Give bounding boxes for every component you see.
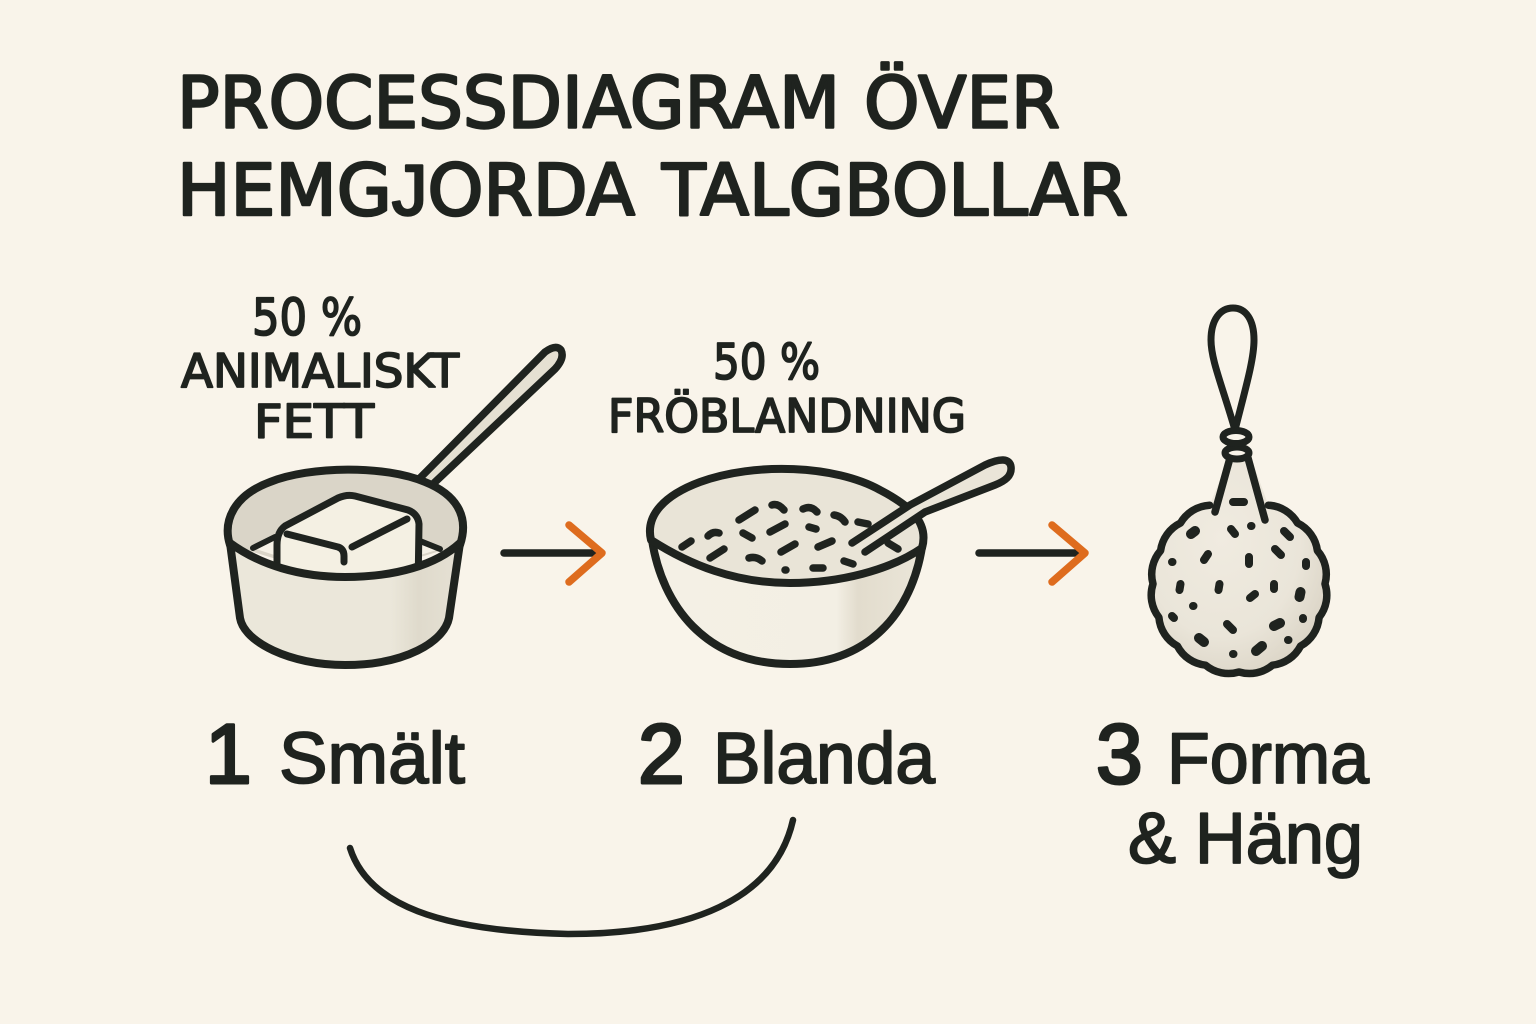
- step 2 label: Blanda: [713, 719, 936, 799]
- pan handle: [420, 347, 562, 484]
- title: HEMGJORDA: [177, 149, 635, 232]
- step 3 label: Forma: [1167, 719, 1370, 799]
- title: TALGBOLLAR: [661, 149, 1128, 232]
- title: PROCESSDIAGRAM: [177, 62, 840, 144]
- bowl rim: [650, 469, 924, 583]
- label: 50% animaliskt fett: ANIMALISKT: [181, 344, 460, 398]
- bowl body: [652, 540, 923, 664]
- label: 50% animaliskt fett: FETT: [254, 394, 375, 448]
- label: 50% fröblandning: FRÖBLANDNING: [608, 389, 966, 443]
- step 3 label: Häng: [1195, 799, 1363, 879]
- pool edges: [253, 537, 440, 549]
- melted fat pool: [253, 537, 440, 578]
- knot: [1225, 447, 1249, 459]
- icon: hanging tallow ball: [1151, 308, 1327, 674]
- ball fill: [1151, 455, 1327, 674]
- step 3 label: [1096, 707, 1370, 879]
- arrow: step 2 to step 3: [979, 525, 1085, 582]
- step 3 label: &: [1128, 799, 1176, 879]
- title: ÖVER: [864, 62, 1060, 144]
- icon: saucepan with fat: [228, 347, 562, 665]
- strings to ball: [1215, 458, 1265, 520]
- step 1 label: Smält: [279, 719, 465, 799]
- step 3 label: 3: [1096, 707, 1143, 801]
- pan body: [230, 543, 460, 665]
- step 2 label: 2: [638, 707, 685, 801]
- fat cube: [277, 495, 419, 590]
- seeds: [682, 505, 898, 570]
- label: 50% animaliskt fett: 50 %: [252, 289, 362, 348]
- fat cube edges: [287, 519, 407, 562]
- title: [177, 62, 1128, 232]
- icon: bowl with seeds: [650, 460, 1011, 664]
- curved connector: step 1 to step 2: [350, 820, 793, 934]
- scalloped ball outline: [1151, 505, 1327, 674]
- hanging loop: [1211, 308, 1254, 430]
- step 1 label: 1: [205, 707, 252, 801]
- step 2 label: [638, 707, 936, 801]
- speckles: [1172, 502, 1306, 654]
- label: 50% animaliskt fett: [181, 289, 460, 448]
- step 1 label: [205, 707, 465, 801]
- spoon: [852, 460, 1011, 552]
- arrow: step 1 to step 2: [504, 525, 602, 582]
- pan rim: [228, 470, 463, 545]
- label: 50% fröblandning: 50 %: [713, 334, 820, 391]
- label: 50% fröblandning: [608, 334, 966, 443]
- pan inside: [228, 470, 463, 580]
